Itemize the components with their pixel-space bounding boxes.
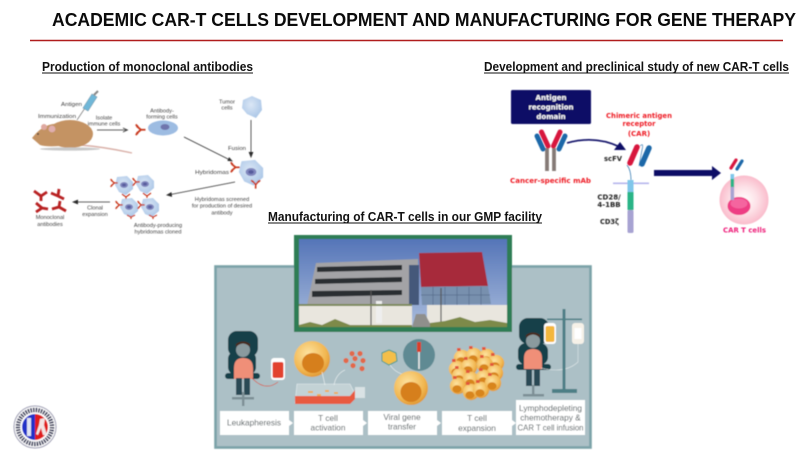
panel: manufacturing process [216, 235, 590, 448]
box: antigen recognition domain: domain [536, 113, 566, 121]
arrow: screening [167, 182, 235, 196]
label: antibody-forming cells: forming cells [146, 114, 178, 120]
label: tumor cells: Tumor [219, 100, 235, 106]
title: ACADEMIC CAR-T CELLS DEVELOPMENT AND MANUFACTURING FOR GENE THERAPY [52, 10, 796, 30]
icon: patient infusion [516, 318, 578, 396]
label: isolate immune cells: Isolate [96, 116, 112, 122]
label: chimeric antigen receptor: (CAR) [628, 130, 650, 138]
icon: viral transfer [382, 339, 435, 405]
step box: T cell activation: T cell [318, 413, 338, 423]
icon: patient leukapheresis [225, 331, 285, 406]
box: antigen recognition domain [511, 90, 591, 124]
heading: monoclonal antibodies: Production of monoclonal antibodies [42, 59, 253, 74]
icon: CAR T cell [720, 160, 768, 224]
arrow: clonal expansion [73, 200, 110, 204]
icon: monoclonal antibody [537, 132, 565, 171]
icon: antibody-forming cell [136, 120, 178, 136]
step box: viral gene transfer: transfer [388, 422, 416, 432]
heading: CAR-T development: Development and preclinical study of new CAR-T cells [484, 59, 789, 74]
arrow: navy to CAR T [654, 166, 721, 180]
label: CD28/4-1BB: CD28/ [597, 194, 621, 202]
icon: syringe [77, 91, 98, 120]
step box: viral gene transfer: Viral gene [383, 412, 421, 422]
step box: leukapheresis: Leukapheresis [227, 418, 281, 428]
step box: T cell expansion [442, 411, 516, 435]
label: isolate immune cells: immune cells [88, 122, 121, 128]
label: antibody-forming cells: Antibody- [150, 108, 174, 114]
step box: T cell expansion: T cell [467, 413, 487, 423]
step box: T cell expansion: expansion [458, 423, 496, 433]
label: hybridomas: Hybridomas [195, 170, 229, 176]
panel: CAR design diagram [510, 90, 768, 234]
icon: hybridoma [231, 160, 263, 189]
step box: viral gene transfer [368, 411, 441, 435]
step box: T cell activation: activation [310, 422, 346, 432]
icon: CAR receptor [613, 145, 649, 233]
label: hybridomas screened: for production of desired [192, 204, 252, 210]
icon: mouse [32, 120, 132, 153]
panel background [216, 266, 590, 448]
label: CD28/4-1BB: 4-1BB [597, 201, 621, 209]
arrow: cells to hybridoma [184, 137, 232, 161]
label: tumor cells: cells [221, 106, 233, 112]
label: scFV: scFV [604, 155, 623, 163]
label: clonal expansion: expansion [82, 212, 108, 218]
step box: leukapheresis [220, 411, 293, 435]
icon: monoclonal antibodies [34, 189, 66, 212]
box: antigen recognition domain: Antigen [536, 94, 566, 102]
icon: cloned hybridomas [111, 175, 159, 219]
box: antigen recognition domain: recognition [528, 104, 574, 112]
step box: lymphodepleting and infusion [516, 400, 585, 435]
arrow: curved to CAR [567, 140, 626, 150]
label: CAR T cells: CAR T cells [723, 226, 766, 234]
label: hybridomas screened: antibody [211, 210, 233, 216]
label: immunization: Immunization [38, 114, 76, 120]
icon: T cell and beads [294, 341, 366, 377]
step box: lymphodepleting and infusion: chemotherapy & [520, 412, 581, 422]
label: fusion: Fusion [228, 146, 246, 152]
arrow: fusion [249, 120, 253, 157]
label: monoclonal antibodies: antibodies [37, 222, 63, 228]
icon: IV pole and bags [544, 309, 584, 393]
label: CD3 zeta: CD3ζ [600, 218, 619, 226]
label: chimeric antigen receptor: receptor [622, 120, 656, 128]
icon: tumor cell [242, 96, 262, 118]
icon: university seal [14, 406, 56, 448]
label: hybridomas screened: Hybridomas screened [195, 197, 249, 203]
label: antibody-producing hybridomas cloned: Antibody-producing [134, 223, 182, 229]
heading: manufacturing: Manufacturing of CAR-T cells in our GMP facility [268, 209, 543, 224]
label: cancer-specific mAb: Cancer-specific mAb [510, 177, 591, 185]
step box: lymphodepleting and infusion: Lymphodepleting [519, 403, 582, 413]
step box: T cell activation [294, 411, 367, 435]
photo: GMP facility [294, 235, 512, 332]
label: monoclonal antibodies: Monoclonal [36, 215, 64, 221]
icon: culture flask [295, 370, 365, 404]
label: clonal expansion: Clonal [87, 206, 103, 212]
step box: lymphodepleting and infusion: CAR T cell infusion [518, 422, 584, 432]
icon: T cell expansion cluster [449, 346, 504, 400]
label: chimeric antigen receptor: Chimeric antigen [606, 112, 672, 120]
panel: monoclonal antibody production diagram [32, 91, 263, 236]
label: antibody-producing hybridomas cloned: hybridomas cloned [135, 230, 181, 236]
label: antigen: Antigen [61, 102, 82, 108]
arrow: isolate [97, 128, 128, 132]
